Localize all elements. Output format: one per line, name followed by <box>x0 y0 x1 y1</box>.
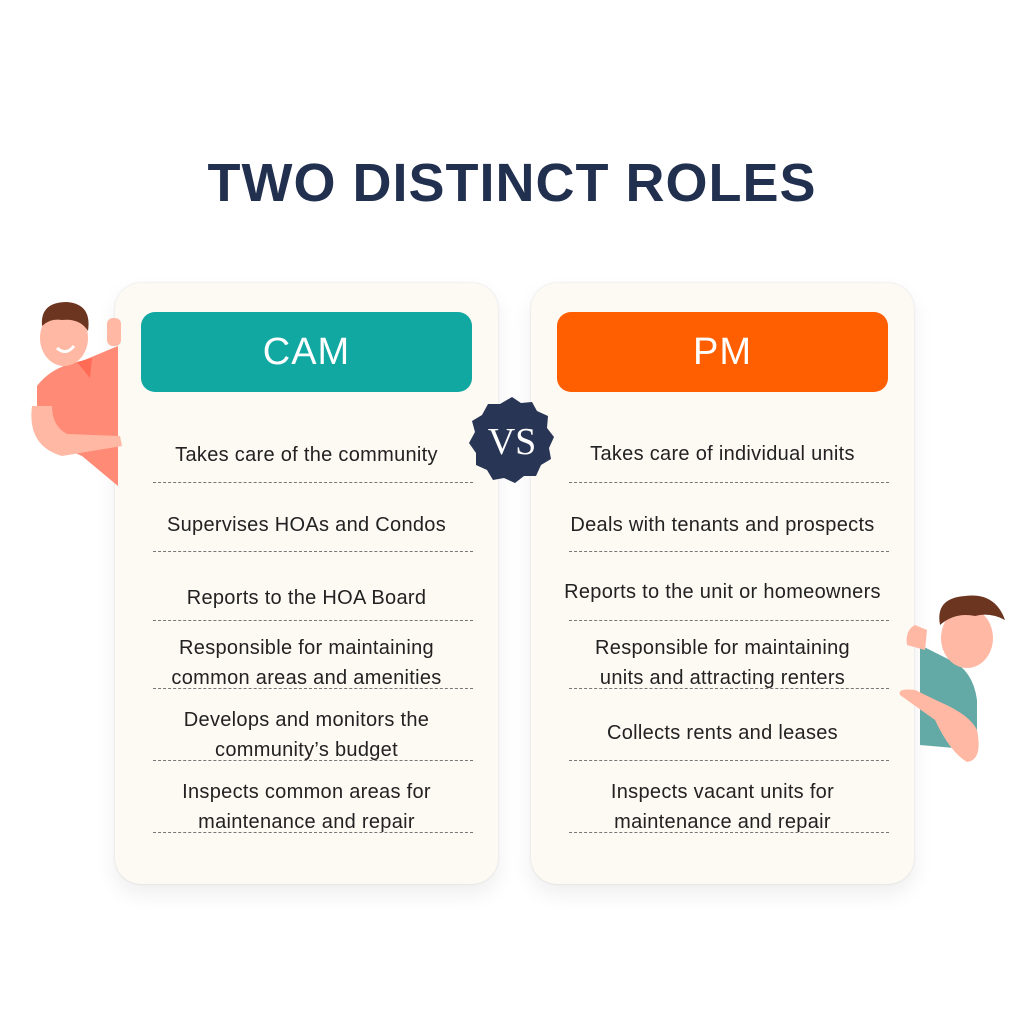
illustration: left person <box>31 302 122 486</box>
item 5 <box>184 709 429 761</box>
item 1: Takes care of the community <box>175 444 438 466</box>
item 5: community’s budget <box>215 739 398 761</box>
header: PM <box>557 312 888 392</box>
panel: PM <box>531 283 914 884</box>
item 6 <box>611 781 834 833</box>
item 4 <box>171 637 442 689</box>
illustration: right person <box>900 596 1005 762</box>
item 4: Responsible for maintaining <box>595 637 850 659</box>
item 6: Inspects vacant units for <box>611 781 834 803</box>
item 4 <box>595 637 850 689</box>
item 2: Supervises HOAs and Condos <box>167 514 446 536</box>
header: CAM: CAM <box>263 331 350 373</box>
item 6 <box>182 781 431 833</box>
item 3: Reports to the unit or homeowners <box>564 581 881 603</box>
item 5: Develops and monitors the <box>184 709 429 731</box>
item 4: Responsible for maintaining <box>179 637 434 659</box>
icon: VS badge <box>469 397 554 483</box>
item 4: common areas and amenities <box>171 667 442 689</box>
item 6: maintenance and repair <box>198 811 415 833</box>
item 4: units and attracting renters <box>600 667 845 689</box>
item 6: maintenance and repair <box>614 811 831 833</box>
icon: VS badge: VS <box>488 421 536 463</box>
item 5: Collects rents and leases <box>607 722 838 744</box>
item 2: Deals with tenants and prospects <box>570 514 875 536</box>
item 1: Takes care of individual units <box>590 443 855 465</box>
panel: CAM <box>115 283 498 884</box>
item 6: Inspects common areas for <box>182 781 431 803</box>
title: TWO DISTINCT ROLES <box>208 153 816 213</box>
header: CAM <box>141 312 472 392</box>
item 3: Reports to the HOA Board <box>187 587 426 609</box>
header: PM: PM <box>693 331 752 373</box>
